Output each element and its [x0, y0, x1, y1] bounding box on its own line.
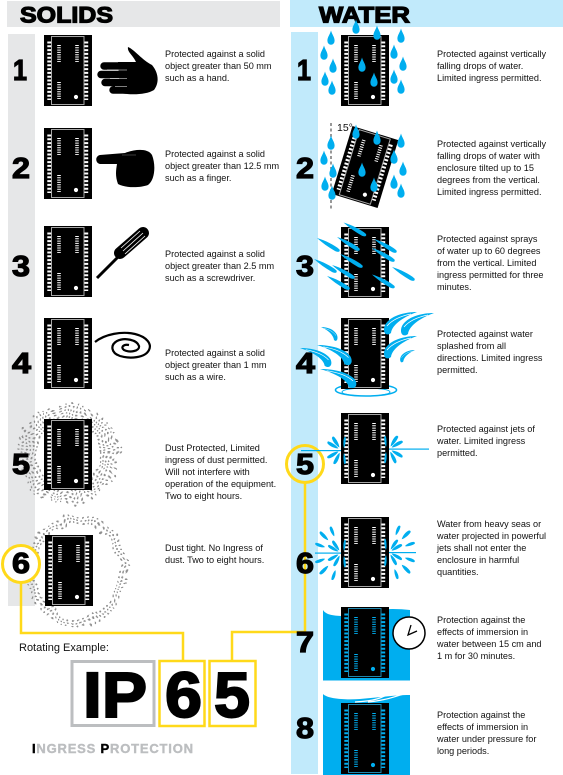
number 8: 8 [296, 713, 314, 745]
description: permitted. [437, 448, 478, 458]
description: Will not interfere with [165, 467, 250, 477]
description: operation of the equipment. [165, 479, 276, 489]
icon: coiled wire [95, 333, 150, 358]
description: Dust tight. No Ingress of [165, 543, 263, 553]
water row 8 [296, 692, 536, 775]
solids row 5 [12, 404, 276, 504]
water row 4 [296, 312, 543, 396]
highlight circle [286, 446, 324, 482]
chip [45, 535, 93, 606]
description: ingress of dust permitted. [165, 455, 267, 465]
puddle [336, 384, 396, 396]
solids row 4 [12, 318, 266, 389]
number 1: 1 [13, 55, 27, 87]
description: Protected against vertically [437, 139, 546, 149]
chip [44, 128, 92, 199]
description: object greater than 50 mm [165, 61, 272, 71]
icon: dust ring [27, 516, 127, 626]
description: dust. Two to eight hours. [165, 555, 264, 565]
heading: water: WATER [319, 2, 410, 28]
description: Protected against sprays [437, 234, 538, 244]
description: object greater than 1 mm [165, 360, 266, 370]
description: Protection against the [437, 710, 525, 720]
description: Protected against a solid [165, 49, 265, 59]
description: water between 15 cm and [436, 639, 542, 649]
angle label: 15° [337, 122, 353, 134]
number 3: 3 [12, 251, 30, 283]
chip immersed [341, 607, 389, 678]
number 4: 4 [296, 348, 315, 380]
water row 3 [296, 222, 544, 298]
chip [341, 413, 389, 484]
description: Limited ingress permitted. [437, 187, 541, 197]
icon: powerful water jets [315, 525, 416, 581]
description: Protected against vertically [437, 49, 546, 59]
chip [44, 226, 92, 297]
description: of water up to 60 degrees [437, 246, 541, 256]
chip [44, 419, 92, 490]
number 2: 2 [296, 153, 314, 185]
highlight circle [2, 546, 40, 582]
chip [44, 35, 92, 106]
number 6: 6 [12, 548, 30, 580]
description: object greater than 2.5 mm [165, 261, 274, 271]
description: minutes. [437, 282, 472, 292]
description: such as a hand. [165, 73, 229, 83]
chip [44, 318, 92, 389]
description: water. Limited ingress [436, 436, 526, 446]
number 6: 6 [296, 548, 314, 580]
icon: falling drops [320, 124, 407, 200]
icon: screwdriver [97, 231, 145, 278]
panel: water header band [290, 0, 563, 27]
icon: pointing finger [96, 150, 154, 187]
description: enclosure in harmful [437, 555, 519, 565]
description: effects of immersion in [437, 722, 528, 732]
heading: solids: SOLIDS [20, 2, 113, 28]
panel: water number column [291, 32, 318, 774]
chip [341, 227, 389, 298]
solids row 1 [13, 35, 272, 106]
vertical reference line [330, 123, 332, 209]
chip [341, 517, 389, 588]
panel: solids number column [8, 34, 35, 606]
description: Protection against the [437, 615, 525, 625]
description: such as a screwdriver. [165, 273, 255, 283]
number 7: 7 [296, 627, 314, 659]
description: 1 m for 30 minutes. [437, 651, 515, 661]
description: from the vertical. Limited [437, 258, 536, 268]
description: splashed from all [437, 341, 506, 351]
number 5: 5 [12, 449, 30, 481]
description: Water from heavy seas or [437, 519, 541, 529]
water row 6 [296, 517, 546, 588]
icon: water spray [314, 222, 415, 290]
panel: solids header band [7, 1, 280, 27]
number 3: 3 [296, 251, 314, 283]
IP code: first digit box: 6 [165, 659, 202, 731]
description: directions. Limited ingress [437, 353, 543, 363]
water row 1 [297, 20, 546, 106]
description: effects of immersion in [437, 627, 528, 637]
solids row 3 [12, 226, 274, 297]
water row 5 [286, 413, 535, 484]
icon: hand [101, 47, 158, 94]
description: such as a wire. [165, 372, 226, 382]
description: water under pressure for [436, 734, 536, 744]
icon: splashes [300, 312, 434, 388]
chip tilted [332, 126, 398, 208]
description: water projected in powerful [436, 531, 546, 541]
description: ingress permitted for three [437, 270, 544, 280]
number 2: 2 [12, 153, 30, 185]
description: permitted. [437, 365, 478, 375]
water row 7 [296, 607, 542, 680]
icon: dust cloud [18, 404, 118, 504]
number 1: 1 [297, 55, 311, 87]
description: Two to eight hours. [165, 491, 242, 501]
IP code: IP box: IP [83, 659, 147, 731]
description: falling drops of water. [437, 61, 523, 71]
water surface streaks [355, 692, 407, 702]
water body [323, 694, 410, 775]
description: long periods. [437, 746, 489, 756]
description: falling drops of water with [437, 151, 540, 161]
number 5: 5 [296, 449, 314, 481]
description: Limited ingress permitted. [437, 73, 541, 83]
description: Protected against a solid [165, 149, 265, 159]
caption: ingress protection: INGRESS PROTECTION [32, 741, 193, 756]
description: object greater than 12.5 mm [165, 161, 279, 171]
description: quantities. [437, 567, 479, 577]
description: degrees from the vertical. [437, 175, 540, 185]
solids row 2 [12, 128, 279, 199]
water row 2 [296, 122, 546, 209]
description: Dust Protected, Limited [165, 443, 260, 453]
description: enclosure tilted up to 15 [437, 163, 534, 173]
chip [341, 35, 389, 106]
description: Protected against water [437, 329, 533, 339]
description: Protected against a solid [165, 348, 265, 358]
icon: water jets [301, 435, 429, 465]
chip immersed [341, 703, 389, 774]
icon: falling drops [320, 20, 407, 95]
description: Protected against a solid [165, 249, 265, 259]
solids row 6 [2, 516, 264, 626]
label: rotating example: Rotating Example: [19, 642, 109, 654]
connector: water 5 to IP code [232, 482, 305, 661]
IP code: second digit box: 5 [214, 659, 250, 731]
icon: clock [393, 617, 425, 649]
description: Protected against jets of [437, 424, 535, 434]
chip [341, 318, 389, 389]
description: jets shall not enter the [436, 543, 526, 553]
connector: solids 6 to IP code [21, 582, 183, 661]
water body [323, 609, 410, 680]
number 4: 4 [12, 348, 31, 380]
description: such as a finger. [165, 173, 231, 183]
